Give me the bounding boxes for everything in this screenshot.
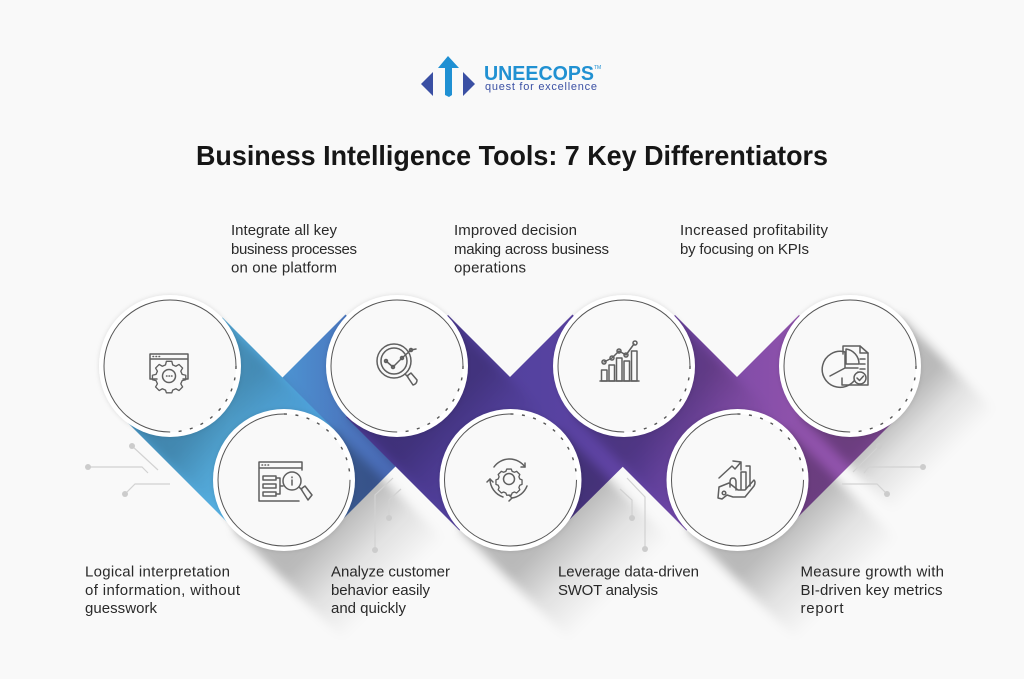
bottom label: logical interpretation: Logical interpretation bbox=[85, 564, 230, 580]
connector lines: analyze bbox=[372, 478, 401, 553]
bottom label: analyze behavior: behavior easily bbox=[331, 582, 430, 599]
top label: decision making bbox=[454, 222, 609, 276]
bottom label: measure growth: report bbox=[800, 600, 844, 617]
zigzag ribbon bbox=[122, 314, 900, 530]
title: Business Intelligence Tools: 7 Key Differentiators bbox=[196, 140, 828, 171]
icon: magnifier with line bbox=[377, 344, 417, 385]
bottom label: SWOT: SWOT analysis bbox=[558, 582, 658, 599]
long shadows below circles bbox=[234, 316, 1015, 645]
top label: decision making: operations bbox=[454, 260, 526, 276]
circle 5: top bbox=[553, 295, 695, 437]
top label: profitability: Increased profitability bbox=[680, 222, 828, 239]
icon: gear cycle bbox=[487, 459, 527, 501]
circle 7: top right bbox=[779, 295, 921, 437]
icon: info search window bbox=[259, 462, 312, 501]
circle 3: top bbox=[326, 295, 468, 437]
bottom label: logical interpretation: guesswork bbox=[85, 600, 158, 617]
icon: report with pie chart bbox=[822, 346, 868, 387]
top label: integrate bbox=[231, 222, 357, 276]
bottom label: measure growth: Measure growth with bbox=[800, 564, 944, 580]
top label: integrate: business processes bbox=[231, 241, 357, 258]
icon: hand with growth chart bbox=[718, 461, 755, 499]
connector lines: leverage bbox=[620, 478, 648, 552]
logo icon: arrows bbox=[421, 56, 475, 97]
circle 4: bottom bbox=[440, 409, 582, 551]
connector lines: right bbox=[842, 443, 926, 497]
bottom label: measure growth bbox=[800, 564, 944, 617]
logo tagline: quest for excellence bbox=[485, 81, 597, 93]
bottom label: SWOT: Leverage data-driven bbox=[558, 564, 699, 580]
top label: profitability: by focusing on KPIs bbox=[680, 241, 809, 258]
icon: browser gear bbox=[150, 354, 188, 393]
circle 2: bottom bbox=[213, 409, 355, 551]
bottom label: logical interpretation bbox=[85, 564, 241, 617]
bottom label: analyze behavior bbox=[331, 564, 450, 617]
bottom label: analyze behavior: and quickly bbox=[331, 600, 406, 617]
bottom label: analyze behavior: Analyze customer bbox=[331, 564, 450, 580]
top label: integrate: Integrate all key bbox=[231, 222, 338, 239]
connector lines: left bbox=[85, 443, 170, 497]
bottom label: logical interpretation: of information, without bbox=[85, 582, 241, 599]
circle 1: top left bbox=[99, 295, 241, 437]
icon: bar chart with trend bbox=[600, 341, 639, 381]
top label: decision making: Improved decision bbox=[454, 222, 577, 239]
logo wordmark: UNEECOPS bbox=[484, 63, 594, 85]
top label: profitability bbox=[680, 222, 828, 258]
top label: integrate: on one platform bbox=[231, 260, 337, 276]
circle 6: bottom bbox=[666, 409, 808, 551]
logo trademark: TM bbox=[594, 65, 601, 71]
logo bbox=[421, 56, 601, 97]
long shadows on ribbon bbox=[129, 316, 748, 495]
bottom label: measure growth: BI-driven key metrics bbox=[800, 582, 942, 599]
top label: decision making: making across business bbox=[454, 241, 609, 258]
bottom label: SWOT bbox=[558, 564, 699, 599]
